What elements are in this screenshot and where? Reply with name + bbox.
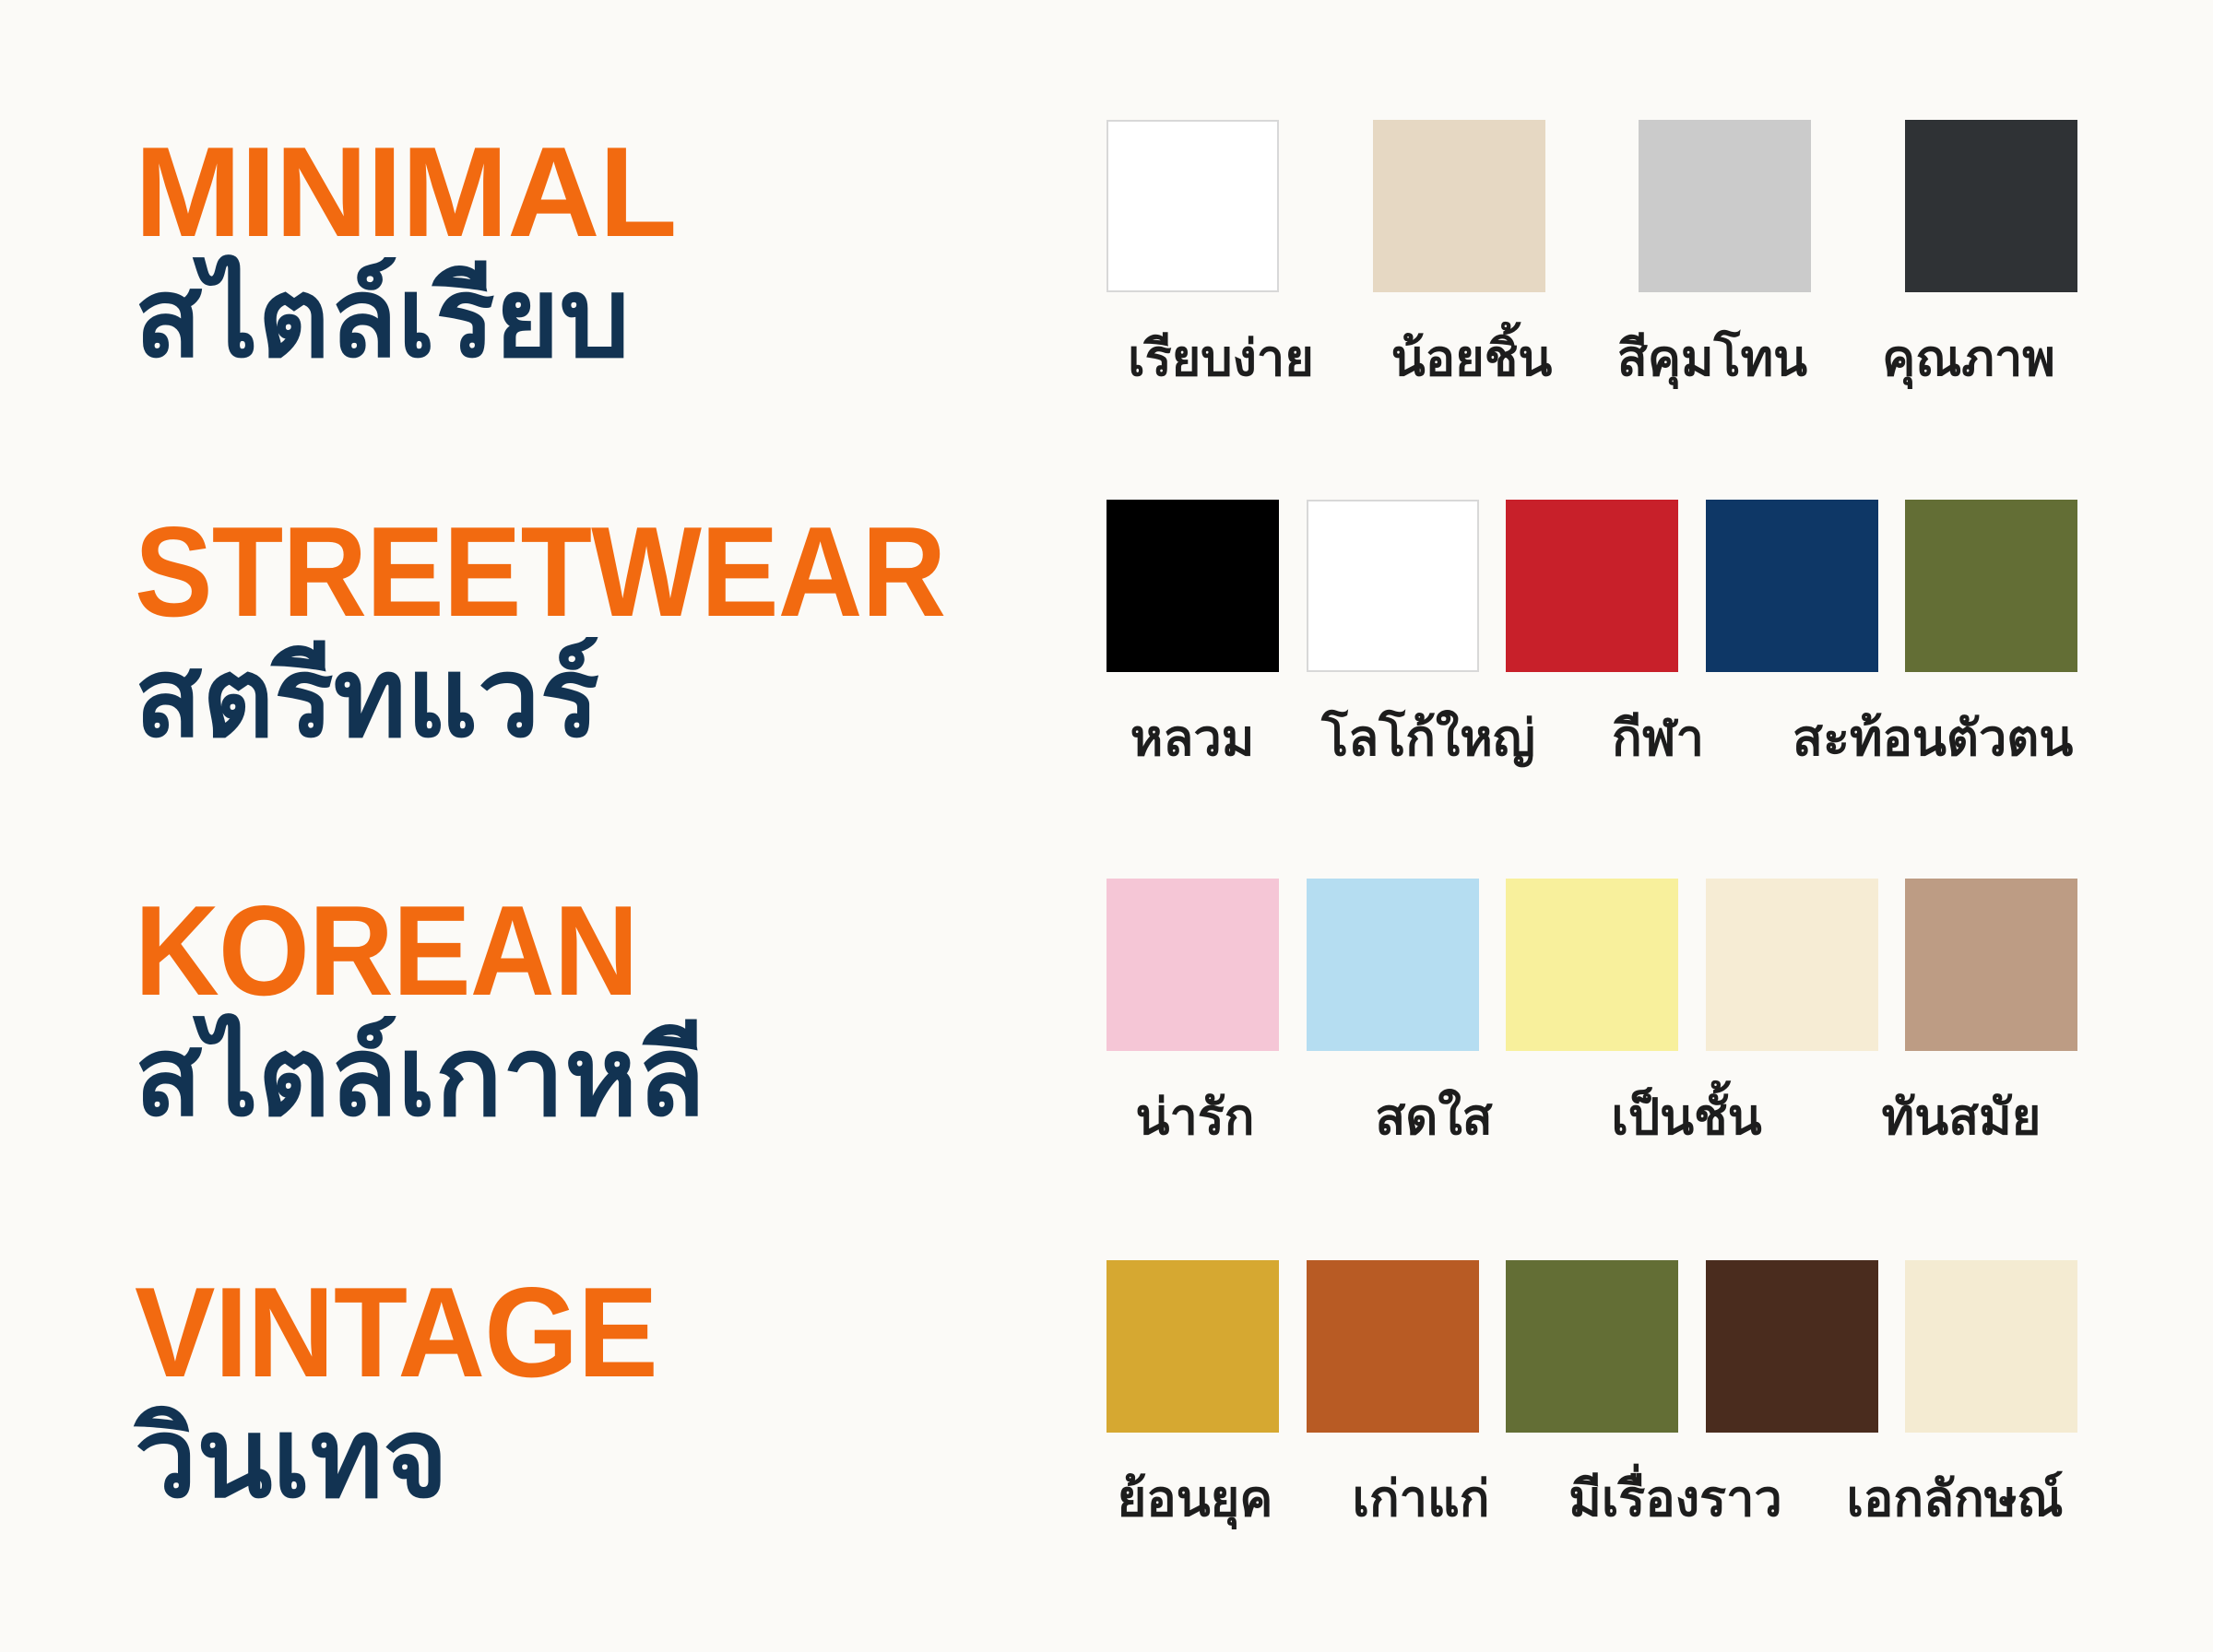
row: vintage — [133, 1260, 2077, 1529]
swatch: rust — [1307, 1260, 1479, 1433]
label: เอกลักษณ์: เอกลักษณ์ — [1846, 1471, 2064, 1527]
label: สะท้อนตัวตน: สะท้อนตัวตน — [1793, 711, 2073, 766]
label: น้อยชิ้น: น้อยชิ้น — [1391, 331, 1552, 386]
subtitle: สตรีทแวร์: สตรีทแวร์ — [135, 636, 599, 760]
swatch: mustard — [1106, 1260, 1279, 1433]
label: กีฬา: กีฬา — [1612, 711, 1704, 766]
row: korean — [135, 879, 2077, 1145]
label: สดใส: สดใส — [1375, 1090, 1493, 1145]
row: minimal — [135, 120, 2077, 389]
swatch: cream — [1905, 1260, 2077, 1433]
swatch: beige — [1373, 120, 1545, 292]
swatch: sky blue — [1307, 879, 1479, 1051]
swatch: navy — [1706, 500, 1878, 672]
label: น่ารัก: น่ารัก — [1136, 1090, 1254, 1145]
label: โลโก้ใหญ่: โลโก้ใหญ่ — [1321, 711, 1535, 766]
label: ทันสมัย: ทันสมัย — [1882, 1090, 2041, 1145]
title: STREETWEAR: STREETWEAR — [135, 501, 945, 643]
swatch: pink — [1106, 879, 1279, 1051]
label: สีคุมโทน: สีคุมโทน — [1617, 331, 1807, 386]
title: MINIMAL: MINIMAL — [135, 121, 676, 264]
subtitle: วินเทจ: วินเทจ — [135, 1397, 448, 1520]
swatch: white — [1307, 500, 1479, 672]
swatch: charcoal — [1905, 120, 2077, 292]
label: เรียบง่าย: เรียบง่าย — [1128, 331, 1314, 386]
swatch: olive — [1905, 500, 2077, 672]
row: streetwear — [135, 500, 2077, 767]
title: KOREAN: KOREAN — [135, 879, 638, 1022]
label: เป็นชั้น: เป็นชั้น — [1611, 1090, 1762, 1145]
swatch: black — [1106, 500, 1279, 672]
swatch: white — [1106, 120, 1279, 292]
swatch: brown — [1706, 1260, 1878, 1433]
subtitle: สไตล์เกาหลี: สไตล์เกาหลี — [135, 1015, 705, 1139]
swatch: red — [1506, 500, 1678, 672]
swatch: grey — [1639, 120, 1811, 292]
subtitle: สไตล์เรียบ: สไตล์เรียบ — [135, 256, 630, 380]
swatch: taupe — [1905, 879, 2077, 1051]
swatch: olive — [1506, 1260, 1678, 1433]
title: VINTAGE: VINTAGE — [135, 1261, 657, 1404]
swatch: cream — [1706, 879, 1878, 1051]
label: คุณภาพ: คุณภาพ — [1882, 331, 2055, 386]
label: ย้อนยุค: ย้อนยุค — [1118, 1471, 1272, 1527]
swatch: pale yellow — [1506, 879, 1678, 1051]
label: มีเรื่องราว: มีเรื่องราว — [1568, 1471, 1782, 1527]
label: เก่าแก่: เก่าแก่ — [1352, 1471, 1489, 1527]
label: หลวม: หลวม — [1130, 711, 1254, 766]
